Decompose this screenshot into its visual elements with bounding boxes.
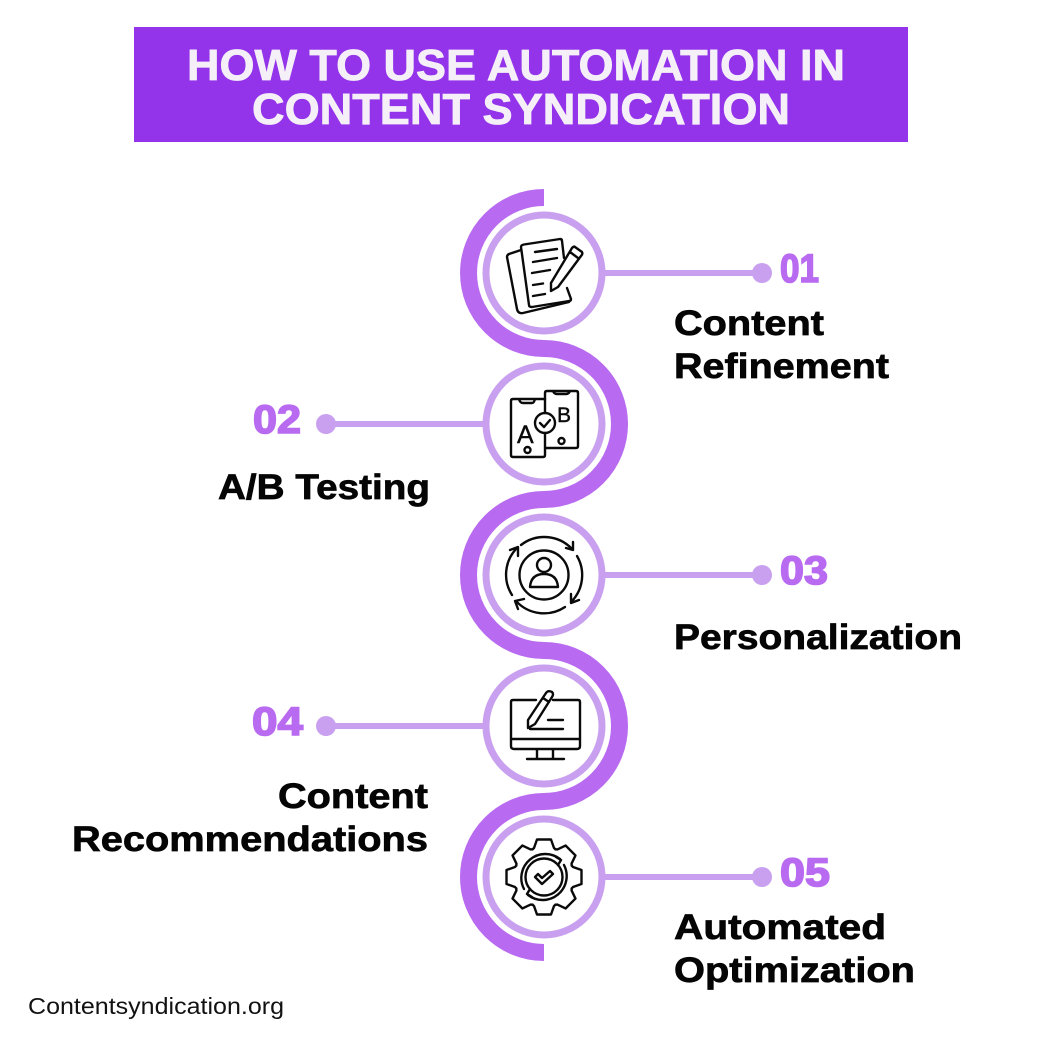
connector 05 <box>604 867 772 887</box>
icon circle: person with cycle arrows <box>486 517 602 633</box>
icon circle: A/B phones: A <box>517 421 534 449</box>
connector 01 <box>604 263 772 283</box>
title banner: CONTENT SYNDICATION <box>252 85 790 134</box>
label: A/B Testing: A/B Testing <box>218 468 430 507</box>
icon circle: A/B phones <box>486 366 602 482</box>
connector 03 <box>604 565 772 585</box>
label: Content Refinement: Refinement <box>674 347 889 386</box>
label: Content Recommendations: Recommendations <box>72 820 428 859</box>
label: Personalization: Personalization <box>674 618 962 657</box>
number 01: 01 <box>780 247 819 291</box>
icon circle: monitor with pencil <box>486 668 602 784</box>
title banner <box>134 27 908 142</box>
label: Automated Optimization: Optimization <box>674 951 915 990</box>
icon circle: document and pencil <box>486 215 602 331</box>
icon circle: gear with check <box>486 819 602 935</box>
label: Content Recommendations: Content <box>278 777 428 816</box>
number 04: 04 <box>252 700 304 744</box>
step 02 <box>218 366 602 507</box>
icon circle: A/B phones: B <box>557 404 571 427</box>
title banner: HOW TO USE AUTOMATION IN <box>187 41 845 90</box>
label: Automated Optimization: Automated <box>674 908 886 947</box>
label: Content Refinement <box>674 304 889 386</box>
label: Automated Optimization <box>674 908 915 990</box>
step 01 <box>486 215 889 386</box>
number 03: 03 <box>780 549 828 593</box>
step 04 <box>72 668 602 859</box>
number 02: 02 <box>253 398 301 442</box>
step 03 <box>486 517 962 657</box>
step 05 <box>486 819 915 990</box>
label: Content Refinement: Content <box>674 304 824 343</box>
footer source text: Contentsyndication.org <box>28 993 284 1019</box>
label: Content Recommendations <box>72 777 428 859</box>
number 05: 05 <box>780 851 830 895</box>
serpentine timeline ribbon <box>468 198 619 952</box>
connector 02 <box>316 414 486 434</box>
connector 04 <box>316 716 486 736</box>
